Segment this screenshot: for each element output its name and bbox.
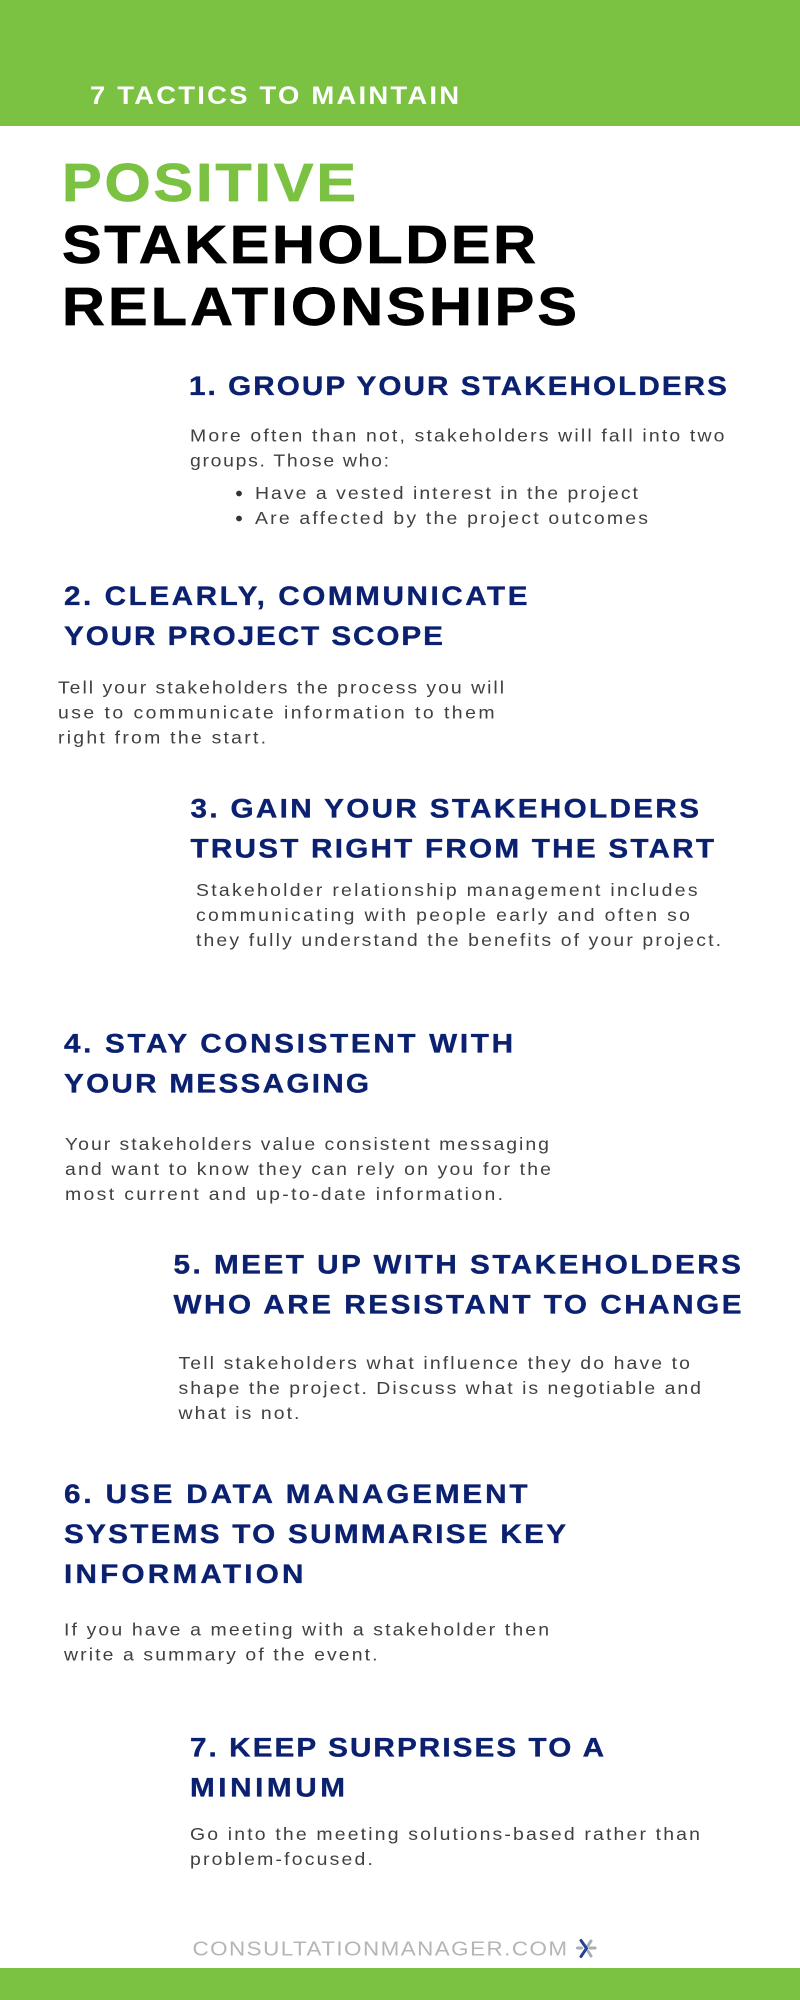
icon: consultation manager logo: [578, 1940, 595, 1956]
text block: tactic 6: [63, 1619, 549, 1664]
bullet list: tactic 1: Have a vested interest in the project: [255, 483, 639, 503]
heading: tactic 5: 5. MEET UP WITH STAKEHOLDERS: [174, 1250, 741, 1280]
text block: tactic 4: Your stakeholders value consistent messaging: [65, 1134, 549, 1154]
text block: tactic 3: Stakeholder relationship management includes: [196, 880, 698, 900]
panel: tactic 2: [58, 581, 528, 747]
heading: tactic 4: 4. STAY CONSISTENT WITH: [64, 1029, 513, 1059]
text block: tactic 2: [58, 677, 504, 747]
panel: tactic 1: [189, 371, 727, 528]
heading: tactic 6: INFORMATION: [64, 1559, 303, 1590]
text block: tactic 6: If you have a meeting with a stakeholder then: [64, 1619, 549, 1639]
heading: tactic 3: 3. GAIN YOUR STAKEHOLDERS: [190, 794, 699, 824]
title: STAKEHOLDER: [62, 215, 536, 275]
banner heading: 7 TACTICS TO MAINTAIN: [90, 81, 459, 110]
heading: tactic 7: 7. KEEP SURPRISES TO A: [190, 1733, 604, 1763]
heading: tactic 6: SYSTEMS TO SUMMARISE KEY: [64, 1519, 566, 1550]
text block: tactic 7: [190, 1824, 700, 1869]
footer website text: CONSULTATIONMANAGER.COM: [192, 1939, 567, 1960]
panel: tactic 4: [64, 1029, 551, 1204]
text block: tactic 4: [65, 1134, 551, 1204]
text block: tactic 4: most current and up-to-date information.: [65, 1184, 503, 1204]
heading: tactic 5: WHO ARE RESISTANT TO CHANGE: [174, 1290, 742, 1320]
panel: tactic 6: [63, 1479, 566, 1664]
text block: tactic 2: right from the start.: [58, 727, 266, 747]
text block: tactic 5: [177, 1353, 701, 1423]
panel: tactic 7: [190, 1733, 700, 1869]
title: [62, 153, 577, 337]
heading: tactic 2: 2. CLEARLY, COMMUNICATE: [64, 581, 528, 612]
panel: tactic 3: [190, 794, 721, 950]
text block: tactic 5: what is not.: [177, 1403, 299, 1423]
text block: tactic 1 intro: groups. Those who:: [190, 450, 389, 470]
heading: tactic 3: TRUST RIGHT FROM THE START: [190, 834, 715, 864]
heading: tactic 5: [174, 1250, 742, 1320]
panel: tactic 5: [174, 1250, 742, 1423]
text block: tactic 1 intro: More often than not, stakeholders will fall into two: [190, 425, 724, 445]
bullet list: tactic 1: Are affected by the project outcomes: [255, 508, 648, 528]
text block: tactic 5: Tell stakeholders what influence they do have to: [178, 1353, 690, 1373]
heading: tactic 4: [64, 1029, 513, 1099]
text block: tactic 7: Go into the meeting solutions-based rather than: [190, 1824, 700, 1844]
text block: tactic 3: communicating with people early and often so: [196, 905, 690, 925]
heading: tactic 1: 1. GROUP YOUR STAKEHOLDERS: [189, 371, 727, 402]
bullet list: tactic 1: [236, 483, 648, 528]
text block: tactic 2: use to communicate information to them: [58, 702, 495, 722]
text block: tactic 2: Tell your stakeholders the process you will: [58, 677, 504, 697]
heading: tactic 2: [64, 581, 528, 652]
heading: tactic 2: YOUR PROJECT SCOPE: [64, 621, 443, 652]
text block: tactic 1 intro: [190, 425, 724, 470]
heading: tactic 3: [190, 794, 715, 864]
text block: tactic 3: they fully understand the benefits of your project.: [196, 930, 721, 950]
text block: tactic 3: [196, 880, 721, 950]
text block: tactic 5: shape the project. Discuss what is negotiable and: [178, 1378, 701, 1398]
heading: tactic 7: [190, 1733, 604, 1803]
title: RELATIONSHIPS: [62, 277, 577, 337]
heading: tactic 7: MINIMUM: [190, 1773, 345, 1803]
top green banner: [0, 0, 800, 126]
bottom green banner: [0, 1968, 800, 2000]
title: POSITIVE: [62, 153, 356, 213]
text block: tactic 4: and want to know they can rely on you for the: [65, 1159, 551, 1179]
heading: tactic 6: 6. USE DATA MANAGEMENT: [64, 1479, 528, 1510]
heading: tactic 6: [64, 1479, 566, 1590]
text block: tactic 6: write a summary of the event.: [63, 1644, 378, 1664]
heading: tactic 4: YOUR MESSAGING: [64, 1069, 369, 1099]
text block: tactic 7: problem-focused.: [190, 1849, 373, 1869]
